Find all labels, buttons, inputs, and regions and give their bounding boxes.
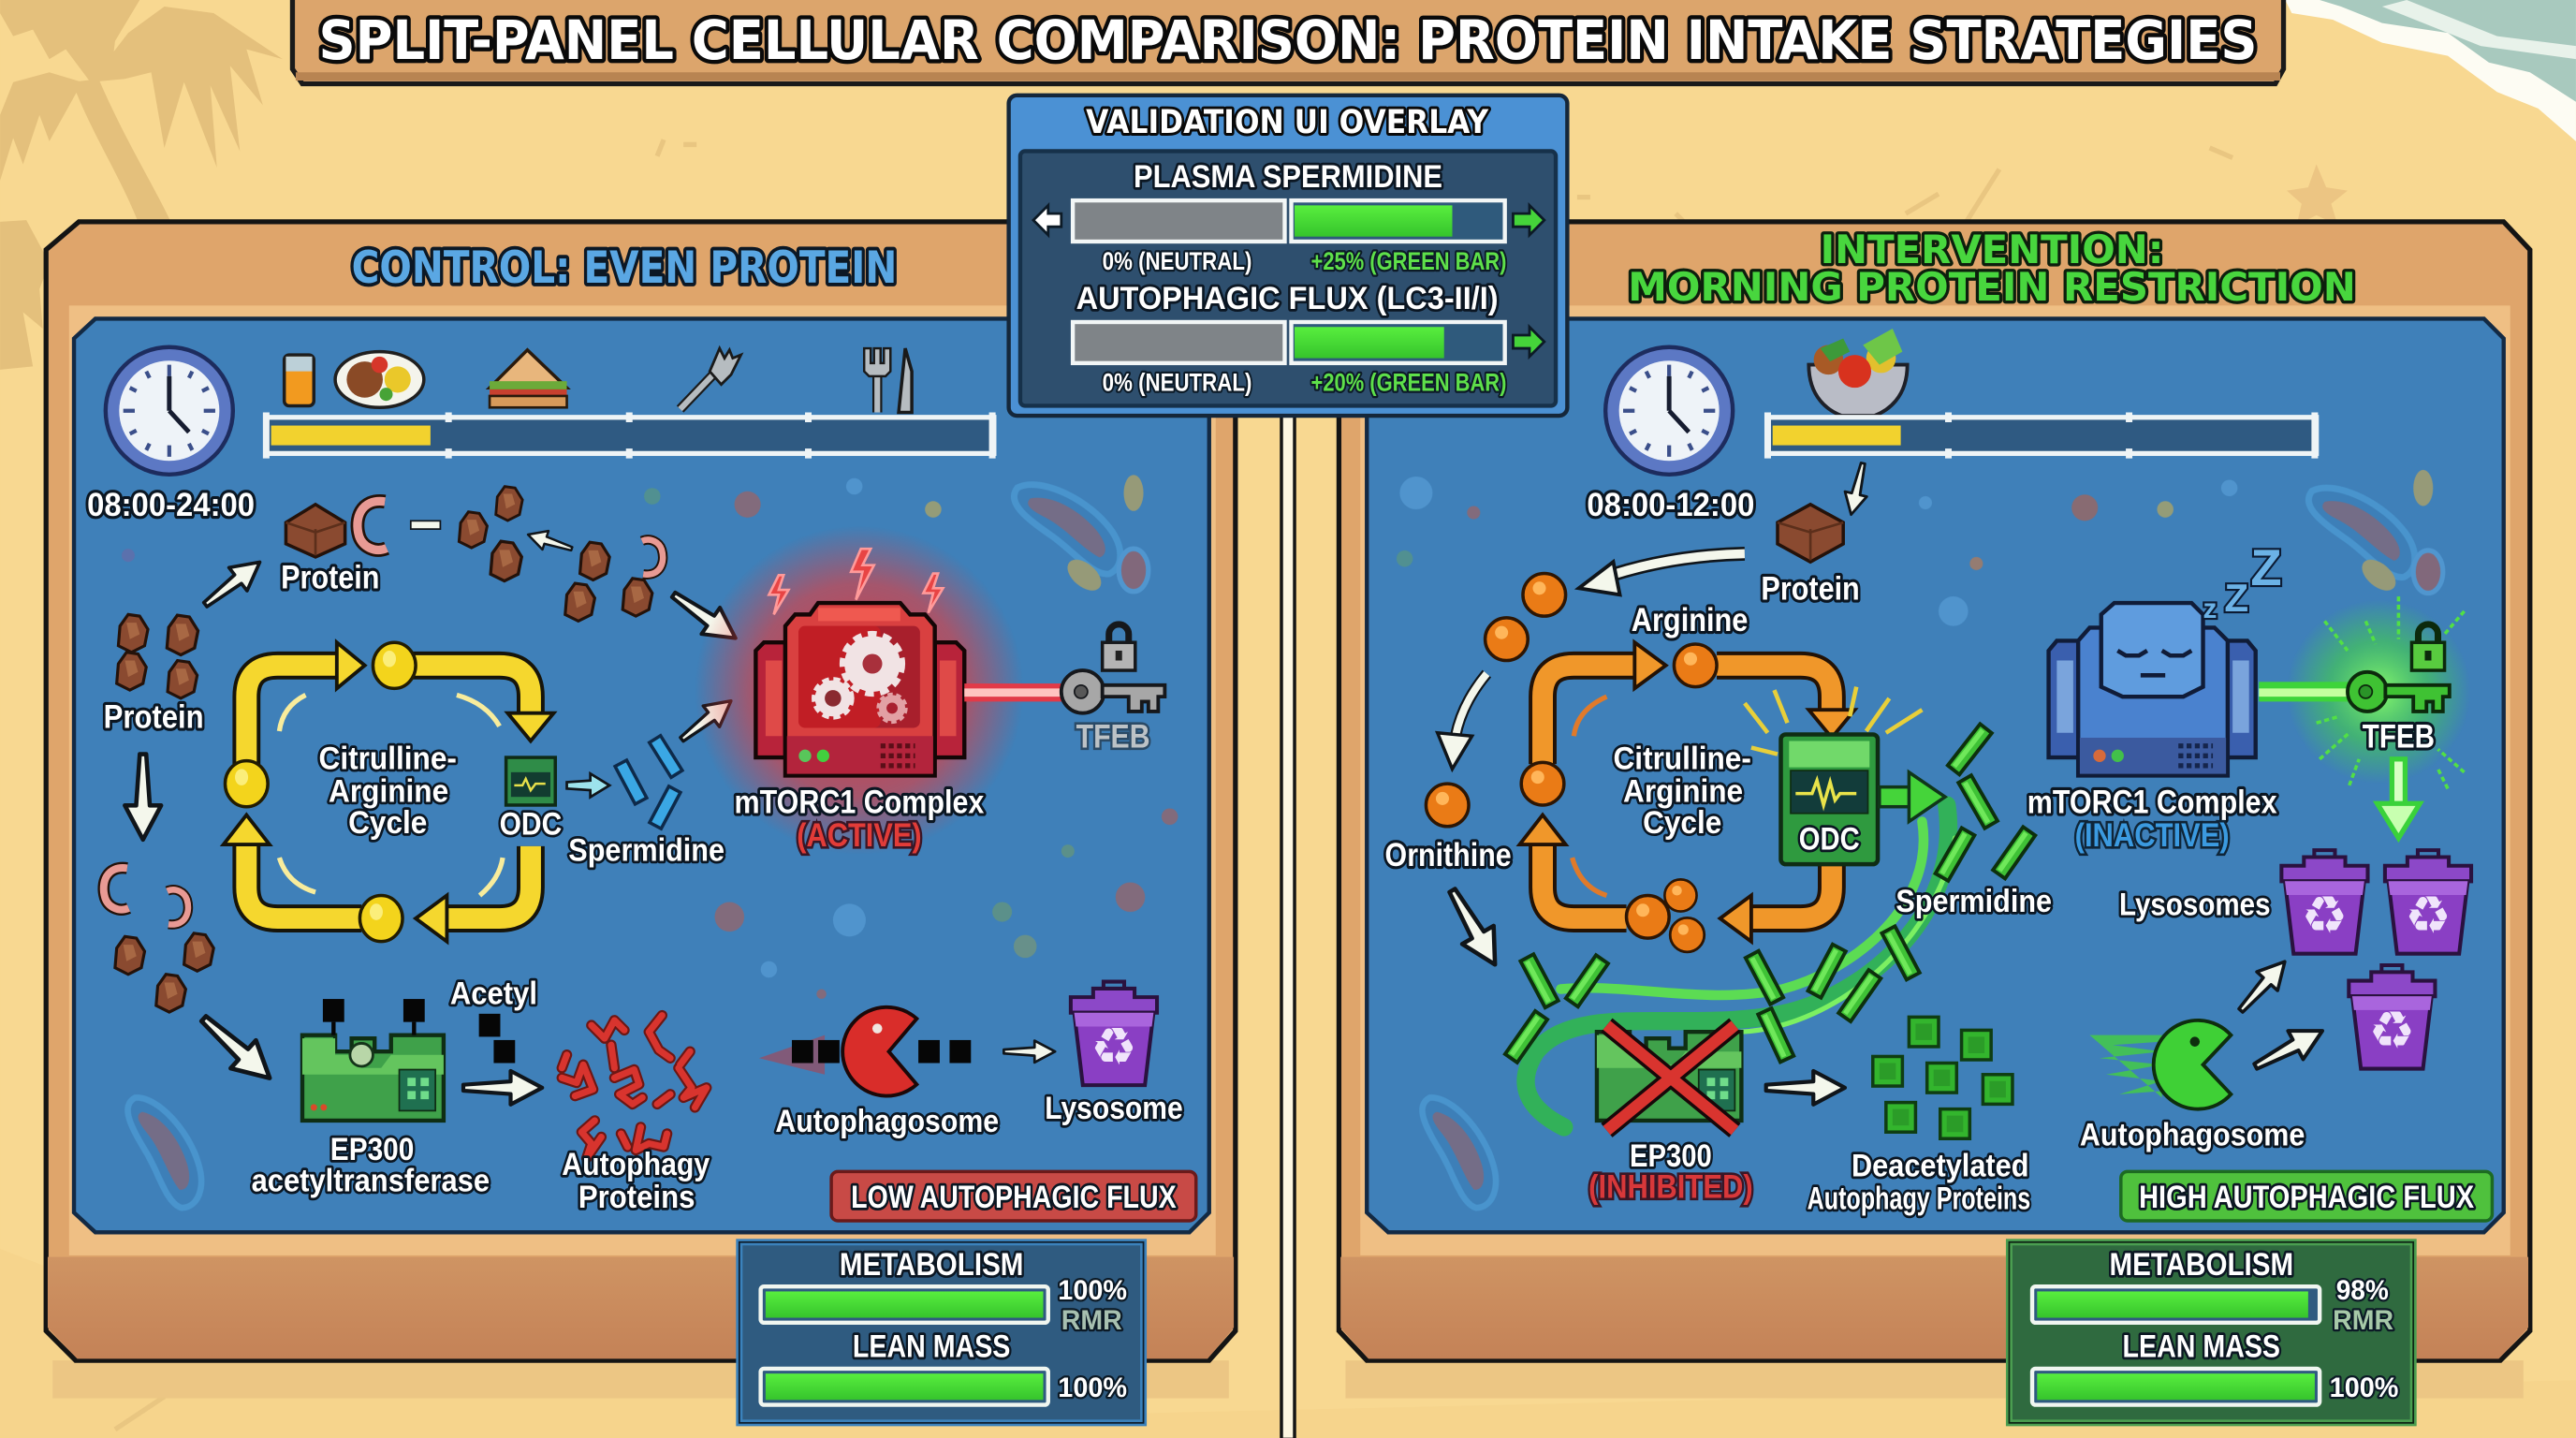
metabolism value: [2333, 1275, 2393, 1336]
TFEB label inactive: TFEB: [1076, 719, 1150, 756]
gears: [815, 636, 905, 721]
arrow: to protein: [1840, 461, 1874, 517]
flux green bar: [1292, 322, 1505, 363]
icon: salad bowl: [1808, 329, 1908, 416]
cycle pipes: [1543, 666, 1832, 918]
cycle pipes: [246, 666, 531, 918]
acetylated autophagy proteins: [562, 1016, 707, 1158]
sleep letters: Z: [2224, 576, 2248, 620]
icon: green padlock: [2411, 624, 2445, 670]
metabolism value: [1058, 1275, 1127, 1336]
arrow: ODC to spermidine: [567, 773, 609, 797]
ODC label: ODC: [1799, 821, 1860, 857]
panel: control even protein: [46, 222, 1236, 1423]
lightning bolts: [768, 549, 943, 614]
sleep letters: Z: [2250, 539, 2282, 596]
cycle label: Arginine: [1623, 773, 1743, 809]
lean mass value: 100%: [2330, 1372, 2398, 1403]
yellow sparks: [1745, 687, 1922, 755]
palm tree silhouette: [0, 0, 283, 370]
plasma green bar: [1292, 200, 1505, 242]
acetyl label: Acetyl: [450, 976, 537, 1011]
cycle inner arrows: [1573, 697, 1606, 895]
cycle label: Cycle: [1643, 805, 1721, 841]
robot arms: [2049, 640, 2256, 757]
green glow rays: [2317, 596, 2465, 788]
overlay heading: VALIDATION UI OVERLAY: [1086, 103, 1489, 141]
metabolism label: METABOLISM: [840, 1247, 1023, 1283]
badge: high autophagic flux: [2121, 1171, 2492, 1221]
arrow: down from protein: [124, 755, 161, 840]
arrows: to lysosomes: [2231, 952, 2330, 1080]
panel heading: MORNING PROTEIN RESTRICTION: [1628, 264, 2356, 310]
mTORC1 complex inactive: [2049, 603, 2256, 775]
badge: low autophagic flux: LOW AUTOPHAGIC FLUX: [851, 1180, 1177, 1215]
citrulline-arginine cycle boosted: [1519, 642, 1854, 952]
lysosomes label: Lysosomes: [2119, 888, 2271, 923]
inhibition beam to TFEB: [964, 683, 1063, 701]
icon: plate of food: [335, 352, 424, 407]
arrow: to mTORC1: [665, 581, 745, 652]
acetyl groups: [323, 999, 515, 1064]
red cross: [1606, 1025, 1734, 1130]
deacetylated proteins label: Autophagy Proteins: [1808, 1181, 2030, 1217]
cycle arrowheads: [1519, 642, 1854, 942]
cycle nodes: [225, 642, 416, 942]
mTORC1 complex active: [695, 526, 1023, 855]
mTORC1 label: mTORC1 Complex: [2027, 785, 2277, 821]
flux readouts: 0% (NEUTRAL): [1103, 368, 1251, 397]
validation UI overlay: [1009, 95, 1567, 416]
plasma spermidine label: PLASMA SPERMIDINE: [1134, 159, 1442, 195]
TFEB label active: TFEB: [2363, 719, 2435, 756]
protein cluster left: [117, 614, 198, 698]
EP300 label: [252, 1132, 490, 1198]
icon: lysosome bins: [2281, 850, 2471, 1069]
faded cell organelles: [108, 472, 1178, 1212]
panel: intervention morning protein restriction: [1339, 222, 2530, 1423]
icon: fork and knife: [864, 348, 912, 413]
plasma neutral bar: [1073, 200, 1284, 242]
cycle pipes inner: [246, 666, 531, 918]
meter panel right: [2009, 1242, 2413, 1423]
sleep letters: [2203, 539, 2282, 624]
panel frame: [1339, 222, 2530, 1399]
title text: SPLIT-PANEL CELLULAR COMPARISON: PROTEIN INTAKE STRATEGIES: [319, 8, 2257, 72]
arrow: plasma left: [1033, 205, 1061, 235]
waste squares: [792, 1040, 971, 1064]
icon: clock: [1603, 345, 1734, 477]
ornithine label: Ornithine: [1385, 837, 1512, 873]
lean mass bar: [2032, 1369, 2320, 1405]
center divider: [1281, 411, 1295, 1438]
arrow: spermidine to mTORC1: [674, 691, 739, 750]
cycle balls: [1521, 644, 1717, 952]
green spermidine flow: [1526, 805, 1955, 1127]
inactive label: (INACTIVE): [2075, 817, 2230, 854]
cycle label: Citrulline-: [1613, 741, 1751, 776]
autophagy proteins label: [562, 1147, 710, 1215]
EP300 enzyme: [302, 1035, 444, 1121]
badge: low autophagic flux: [831, 1171, 1196, 1221]
metabolism value: 98%: [2336, 1275, 2389, 1306]
arrow: to EP300: [191, 1005, 283, 1092]
arginine label: Arginine: [1632, 602, 1748, 638]
EP300 label: acetyltransferase: [252, 1163, 490, 1198]
metabolism bar: [761, 1286, 1048, 1323]
citrulline-arginine cycle: [224, 642, 554, 942]
arrow: to lysosome: [1003, 1041, 1055, 1063]
lean mass bar: [761, 1369, 1048, 1405]
activation beam: [2259, 682, 2351, 701]
plasma readouts: +25% (GREEN BAR): [1311, 246, 1506, 275]
spermidine label: Spermidine: [1895, 884, 2052, 919]
clock time range: 08:00-12:00: [1587, 487, 1754, 523]
icon: green key: [2348, 672, 2450, 712]
EP300 inhibited: [1597, 1025, 1741, 1130]
cycle label: [319, 741, 457, 841]
robot body: [785, 603, 935, 775]
cycle label: [1613, 741, 1751, 841]
autophagosome green pacman: [2089, 1020, 2231, 1109]
plasma readouts: [1103, 246, 1506, 275]
green TFEB glow: [2287, 600, 2471, 784]
arrow: TFEB down: [2378, 759, 2420, 838]
active label: (ACTIVE): [797, 817, 922, 854]
starfish decoration: [2287, 165, 2348, 225]
icon: grey key: [1061, 670, 1164, 713]
arrow: flux right: [1513, 327, 1544, 357]
autophagic flux label: AUTOPHAGIC FLUX (LC3-II/I): [1076, 281, 1499, 316]
protein label: Protein: [281, 559, 379, 595]
fragments cluster: [104, 868, 213, 1012]
icon: juice glass: [285, 355, 314, 405]
meter panel left: [739, 1242, 1144, 1423]
metabolism value: RMR: [2333, 1305, 2393, 1336]
curved arrow: protein to ornithine: [1579, 553, 1745, 594]
deacetylated proteins label: [1808, 1149, 2030, 1217]
lean mass label: LEAN MASS: [2123, 1329, 2280, 1365]
timeline eating window bar: [1767, 413, 2317, 459]
panel heading: [1628, 227, 2356, 310]
cycle label: Arginine: [329, 773, 448, 809]
protein label: Protein: [1761, 571, 1860, 608]
arrow: to autophagy proteins: [463, 1071, 542, 1105]
EP300 label: EP300: [330, 1132, 414, 1167]
cycle label: Citrulline-: [319, 741, 457, 776]
deacetylated protein squares: [1873, 1017, 2012, 1138]
icon: lysosome bin: [1071, 982, 1157, 1085]
protein molecules stream: [285, 487, 663, 621]
spermidine label: Spermidine: [568, 833, 724, 869]
deacetylated proteins label: Deacetylated: [1852, 1149, 2029, 1184]
metabolism value: RMR: [1061, 1305, 1122, 1336]
flux readouts: [1103, 368, 1506, 397]
red glow: [695, 526, 1023, 855]
autophagy proteins label: Autophagy: [562, 1147, 710, 1182]
robot body: [2078, 627, 2228, 775]
clock time range: 08:00-24:00: [87, 487, 255, 523]
icon: fork: [681, 348, 741, 409]
flux readouts: +20% (GREEN BAR): [1311, 368, 1506, 397]
robot arms: [755, 642, 964, 757]
icon: grey padlock: [1103, 624, 1135, 670]
arrow: plasma right: [1513, 205, 1544, 235]
sleeping face: [2117, 651, 2191, 675]
cycle pipes inner: [1543, 666, 1832, 918]
ODC enzyme large: [1781, 734, 1878, 864]
autophagy proteins label: Proteins: [578, 1180, 695, 1215]
mTORC1 label: mTORC1 Complex: [735, 785, 985, 821]
metabolism value: 100%: [1058, 1275, 1127, 1306]
autophagosome label: Autophagosome: [775, 1104, 999, 1139]
orange molecules: [1426, 574, 1566, 827]
icon: protein cube: [1778, 505, 1843, 562]
arrow: to EP300: [1437, 882, 1511, 974]
arrow: to deacetylated proteins: [1766, 1071, 1845, 1105]
icon: clock: [104, 345, 235, 477]
arrow: to protein: [197, 550, 269, 616]
plasma readouts: 0% (NEUTRAL): [1103, 246, 1251, 275]
arrow: ODC green output: [1880, 772, 1945, 822]
flux neutral bar: [1073, 322, 1284, 363]
faded cell organelles: [1397, 470, 2443, 1212]
lean mass label: LEAN MASS: [853, 1329, 1010, 1365]
badge: high autophagic flux: HIGH AUTOPHAGIC FLUX: [2139, 1180, 2474, 1215]
panel heading: CONTROL: EVEN PROTEIN: [352, 242, 897, 294]
autophagosome label: Autophagosome: [2080, 1117, 2305, 1152]
curved arrow: down left: [1438, 674, 1486, 769]
cycle label: Cycle: [348, 805, 427, 841]
sleep letters: z: [2203, 594, 2217, 624]
protein label left: Protein: [104, 698, 204, 735]
sea and foam: [2285, 0, 2576, 141]
metabolism bar: [2032, 1286, 2320, 1323]
icon: sandwich: [490, 350, 567, 407]
panel frame: [46, 222, 1236, 1399]
title banner: [292, 0, 2284, 84]
inhibited label: (INHIBITED): [1588, 1168, 1753, 1205]
lysosome label: Lysosome: [1045, 1091, 1183, 1126]
lean mass value: 100%: [1058, 1372, 1127, 1403]
spermidine green sticks: [1505, 724, 2035, 1063]
cycle inner small arrows: [279, 695, 503, 895]
spermidine sticks: [615, 736, 682, 829]
ODC label: ODC: [500, 807, 562, 843]
cycle arrowheads: [224, 642, 554, 942]
timeline eating window bar: [266, 413, 994, 459]
EP300 label: EP300: [1630, 1138, 1712, 1174]
metabolism label: METABOLISM: [2110, 1247, 2293, 1283]
panel heading: INTERVENTION:: [1821, 227, 2163, 272]
autophagosome red pacman: [759, 1007, 929, 1096]
ODC enzyme small: [506, 757, 555, 805]
